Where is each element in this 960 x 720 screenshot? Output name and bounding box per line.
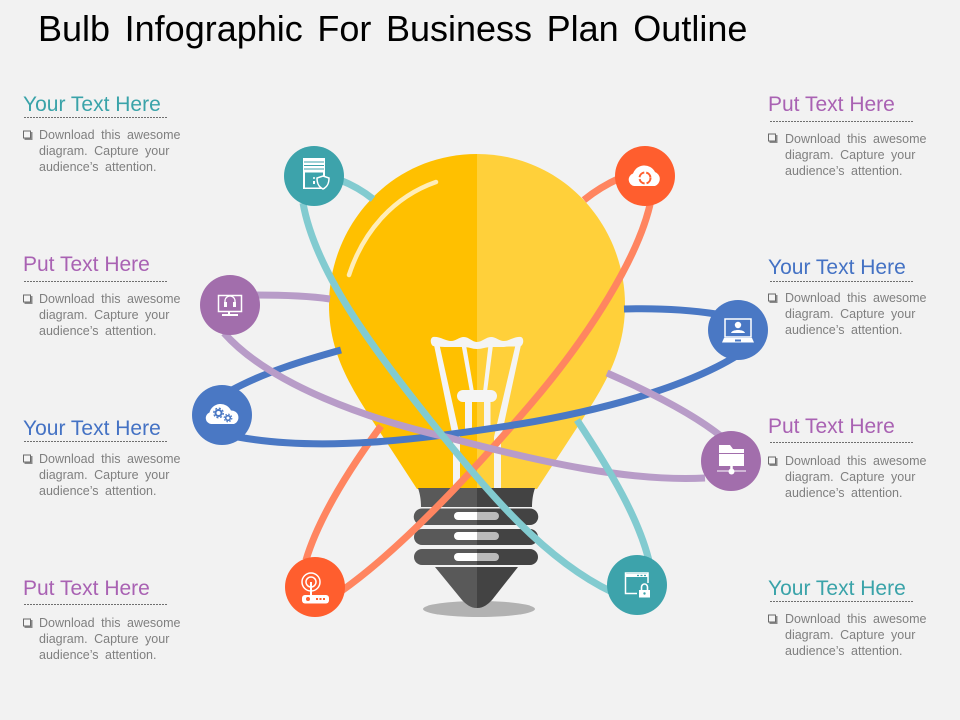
text block: bottom left: Put Text Here	[23, 577, 150, 600]
text block: top right: Download this awesome	[785, 132, 927, 146]
orbit: teal	[303, 180, 650, 592]
icon: cloud sync	[615, 146, 675, 206]
shadow under bulb	[423, 601, 535, 617]
orbit: purple	[224, 295, 722, 479]
text block: top right: Put Text Here	[768, 93, 895, 116]
text block: upper middle left: Put Text Here	[23, 253, 150, 276]
text block: lower middle left: diagram. Capture your	[39, 468, 169, 482]
socket bands	[414, 508, 477, 525]
text block: upper middle right: Your Text Here	[768, 256, 906, 279]
text block: bottom left: diagram. Capture your	[39, 632, 169, 646]
text block: top right: audience’s attention.	[785, 164, 902, 178]
text block: upper middle right: audience’s attention.	[785, 323, 902, 337]
text block: bottom right	[768, 577, 927, 658]
text block: bottom right: diagram. Capture your	[785, 628, 915, 642]
text block: lower middle left: Download this awesome	[39, 452, 181, 466]
text block: bottom right: audience’s attention.	[785, 644, 902, 658]
icon: wifi router	[285, 557, 345, 617]
text block: lower middle right: Download this awesome	[785, 454, 927, 468]
text block: bottom left	[23, 577, 181, 662]
title: Bulb Infographic For Business Plan Outline	[38, 8, 747, 49]
text block: upper middle left	[23, 253, 181, 338]
text block: bottom left: Download this awesome	[39, 616, 181, 630]
text block: lower middle right: audience’s attention.	[785, 486, 902, 500]
text block: top left: Your Text Here	[23, 93, 161, 116]
text block: lower middle left: Your Text Here	[23, 417, 161, 440]
text block: lower middle left	[23, 417, 181, 498]
text block: top right: diagram. Capture your	[785, 148, 915, 162]
icon: monitor headset	[200, 275, 260, 335]
socket tip	[435, 567, 477, 608]
text block: upper middle left: Download this awesome	[39, 292, 181, 306]
text block: top left	[23, 93, 181, 174]
text block: upper middle left: diagram. Capture your	[39, 308, 169, 322]
text block: lower middle right: Put Text Here	[768, 415, 895, 438]
orbit: blue	[232, 309, 738, 444]
icon: network folder	[701, 431, 761, 491]
orbit: orange	[306, 178, 651, 592]
text block: lower middle right	[768, 415, 927, 500]
text block: upper middle right: Download this awesome	[785, 291, 927, 305]
text block: top left: diagram. Capture your	[39, 144, 169, 158]
icon: laptop user	[708, 300, 768, 360]
text block: top left: Download this awesome	[39, 128, 181, 142]
bulb glass left half	[329, 154, 477, 489]
socket collar	[418, 488, 477, 507]
filament	[431, 337, 523, 488]
text block: upper middle right	[768, 256, 927, 337]
text block: upper middle right: diagram. Capture your	[785, 307, 915, 321]
text block: top right	[768, 93, 927, 178]
socket highlights	[454, 512, 477, 520]
light bulb	[329, 154, 625, 608]
text block: lower middle left: audience’s attention.	[39, 484, 156, 498]
text block: bottom right: Your Text Here	[768, 577, 906, 600]
icon: browser lock	[607, 555, 667, 615]
bulb glass right half	[477, 154, 625, 489]
glass highlight	[349, 182, 436, 275]
text block: top left: audience’s attention.	[39, 160, 156, 174]
icon: server shield	[284, 146, 344, 206]
icon: cloud gears	[192, 385, 252, 445]
text block: upper middle left: audience’s attention.	[39, 324, 156, 338]
text block: lower middle right: diagram. Capture your	[785, 470, 915, 484]
text block: bottom left: audience’s attention.	[39, 648, 156, 662]
text block: bottom right: Download this awesome	[785, 612, 927, 626]
